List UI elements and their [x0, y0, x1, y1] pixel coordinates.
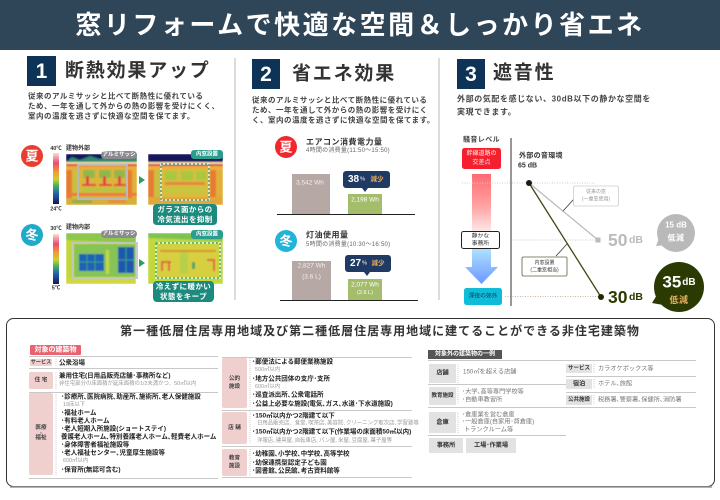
- label: inner window installed: [522, 257, 567, 276]
- row: education: 施設: [229, 462, 240, 470]
- icon: winter badge: [275, 230, 297, 252]
- label: late night suburb: 深夜の郊外: [468, 292, 498, 300]
- callout: summer result: [153, 204, 217, 225]
- bar chart: summer electricity: 3,542 Wh: [296, 180, 324, 186]
- row: public offices: 税務署､警察署､保健所､消防署: [598, 396, 682, 404]
- row: warehouses: [429, 410, 534, 434]
- bubble: 15 dB reduction: [656, 214, 695, 252]
- panel: section 2 energy saving: [252, 59, 435, 300]
- callout: winter result: 状態をキープ: [160, 291, 207, 301]
- tag: eligible buildings: 対象の建築物: [34, 344, 76, 354]
- icon: summer badge: [21, 145, 43, 167]
- pill: inner window: 内窓設置: [196, 150, 218, 158]
- section 3 body text: 実現できます。: [457, 106, 516, 116]
- label: inner window installed: 内窓設置: [534, 259, 555, 266]
- header band with title: 窓リフォームで快適な空間＆しっかり省エネ: [75, 10, 645, 40]
- icon: winter badge: 冬: [279, 234, 293, 248]
- outside sound environment label: 外部の音環境: [519, 150, 563, 160]
- icon: summer badge: 夏: [279, 140, 293, 154]
- row: medical and welfare: ･: [40, 431, 42, 437]
- section 1 body text: 従来のアルミサッシと比べて断熱性に優れている: [28, 90, 203, 100]
- row: medical and welfare: ･身体障害者福祉施設等: [61, 440, 130, 448]
- bubble: 15 dB reduction: 15 dB: [665, 220, 687, 230]
- row: public facilities: 500㎡以内: [255, 365, 280, 373]
- row: hotels: [566, 379, 632, 389]
- row: shops: [222, 410, 419, 444]
- row: education: ･幼保連携型認定子ども園: [252, 458, 327, 466]
- tag: factories: 工場･作業場: [474, 441, 508, 449]
- row: karaoke: カラオケボックス等: [598, 364, 654, 372]
- section 2 body text: く、室内の温度を逃さずに快適な空間を保てます。: [252, 114, 435, 124]
- row: medical and welfare: ･老人短期入所施設(ショートステイ): [61, 424, 166, 432]
- section 2 number badge: [252, 59, 280, 89]
- row: karaoke: [566, 364, 654, 373]
- row: medical and welfare: 養護老人ホーム､特別養護老人ホーム､軽費老人ホーム: [61, 432, 217, 440]
- row: service: 公衆浴場: [59, 358, 86, 366]
- row: housing: 非住宅部分の床面積が延床面積の1/2未満かつ、50㎡以内: [59, 379, 196, 387]
- section 2 number badge: 2: [260, 63, 272, 86]
- row: schools: ･大学､高等専門学校等: [462, 388, 524, 396]
- section 2 body text: [252, 94, 435, 124]
- pill: inner window winter: [191, 230, 223, 239]
- callout: 38 percent reduction: 38%: [348, 174, 365, 185]
- kerosene usage heading: 5時間の消費量(10:30～16:50): [306, 240, 390, 248]
- row: housing: [29, 370, 196, 389]
- row: schools: 教育施設: [431, 391, 454, 399]
- row: medical and welfare: 600㎡以内: [63, 456, 88, 464]
- label: conventional window: 従来の窓: [586, 188, 606, 195]
- panel: section 1 insulation: [21, 56, 223, 302]
- arrow: winter: [139, 259, 145, 267]
- row: public facilities: 施設: [229, 382, 240, 390]
- section 1 body text: ため、一年を通して外からの熱の影響を受けにくく、: [28, 100, 220, 110]
- tag: ineligible buildings: [428, 350, 502, 359]
- winter label: building interior: 建物内部: [66, 223, 90, 231]
- air conditioner usage heading: 4時間の消費量(11:50～15:50): [306, 146, 390, 154]
- bar chart: winter kerosene: 2,827 Wh: [298, 262, 326, 270]
- noise level scale heading: 騒音レベル: [463, 134, 500, 144]
- panel: building regulations: [6, 318, 714, 487]
- section 1 body text: [28, 90, 220, 120]
- regulations heading: 第一種低層住居専用地域及び第二種低層住居専用地域に建てることができる非住宅建築物: [120, 323, 640, 338]
- bubble: 35 dB reduction: 低減: [669, 294, 689, 305]
- row: public facilities: ･地方公共団体の支庁･支所: [252, 374, 330, 382]
- icon: winter badge: [21, 224, 43, 246]
- row: karaoke: サービス: [568, 364, 590, 372]
- row: warehouses: 倉庫: [436, 418, 449, 426]
- label: quiet office: 静かな: [472, 232, 489, 240]
- row: medical and welfare: ･有料老人ホーム: [61, 416, 110, 424]
- bar chart: winter kerosene: 2,077 Wh: [351, 282, 379, 288]
- value: 50 dB: 50dB: [608, 230, 643, 250]
- pill: aluminium sash winter: アルミサッシ: [103, 230, 136, 237]
- row: shops: ･150㎡以内かつ2階建て以下(作業場の床面積50㎡以内): [252, 426, 411, 436]
- row: stores over limit: 店舗: [436, 368, 449, 376]
- row: shops: 店 舗: [228, 423, 241, 431]
- callout: 38 percent reduction: 減少: [370, 174, 384, 183]
- row: stores over limit: 150㎡を超える店舗: [463, 368, 516, 376]
- summer temperature scale: [50, 145, 62, 212]
- pill: aluminium sash: [101, 151, 137, 159]
- row: medical and welfare: ･福祉ホーム: [61, 408, 97, 416]
- row: public facilities: [222, 356, 393, 408]
- value: 30 dB: 30dB: [608, 287, 643, 307]
- row: warehouses: トランクルーム等: [464, 426, 513, 434]
- arrow: summer: [139, 176, 145, 184]
- outside sound environment label: [518, 150, 563, 170]
- section 1 number badge: [27, 56, 56, 86]
- bar chart: summer electricity: 2,198 Wh: [351, 196, 379, 204]
- section 3 number badge: [457, 59, 485, 89]
- line chart: sound reduction: [526, 180, 604, 300]
- row: public facilities: 600㎡以内: [255, 382, 280, 390]
- winter temperature scale: [50, 225, 62, 292]
- callout: 27 percent reduction: 減少: [372, 258, 385, 267]
- section 3 number badge: 3: [465, 63, 477, 86]
- outside sound environment label: 65 dB: [518, 162, 537, 170]
- row: service: サービス: [31, 358, 51, 366]
- row: hotels: 宿泊: [573, 380, 585, 388]
- table: eligible buildings middle: [222, 356, 419, 478]
- section 3 body text: 外部の気配を感じない、30dB以下の静かな空間を: [457, 94, 651, 104]
- row: education: ･幼稚園､小学校､中学校､高等学校: [252, 448, 350, 458]
- label: inner window installed: (二重窓相当): [530, 266, 559, 274]
- callout: summer result: ガラス面からの: [157, 204, 213, 214]
- callout: winter result: 冷えずに暖かい: [156, 281, 211, 291]
- callout: winter result: [153, 281, 214, 302]
- thermal image: winter aluminium sash: [66, 233, 137, 284]
- row: schools: [429, 387, 524, 405]
- pill: aluminium sash winter: [101, 230, 137, 238]
- tag: eligible buildings: [30, 344, 81, 355]
- icon: summer badge: [275, 136, 297, 158]
- section 3 body text: [457, 94, 651, 116]
- row: public facilities: ･巡査派出所､公衆電話所: [252, 390, 324, 398]
- section 1 number badge: 1: [36, 60, 48, 83]
- callout: summer result: 冷気流出を抑制: [157, 214, 213, 224]
- row: schools: ･自動車教習所: [462, 396, 502, 404]
- bar chart: winter kerosene: (2.6 L): [357, 290, 373, 296]
- air conditioner usage heading: [306, 136, 390, 154]
- section 2 heading: 省エネ効果: [292, 62, 396, 84]
- row: stores over limit: [429, 364, 516, 383]
- row: housing: 住 宅: [35, 376, 48, 384]
- summer temperature scale: 40℃: [50, 145, 62, 152]
- bar chart: winter kerosene: [280, 255, 418, 300]
- summer temperature scale: 24℃: [50, 206, 62, 212]
- table: ineligible buildings right: [566, 360, 696, 408]
- row: hotels: ホテル､旅館: [598, 380, 632, 388]
- row: public facilities: 公的: [229, 374, 240, 382]
- row: public offices: [566, 395, 682, 405]
- panel: section 3 sound insulation: [457, 59, 704, 312]
- thermal image: summer aluminium sash: [66, 154, 137, 205]
- row: shops: 洋服店､建具屋､自転車店､パン屋､米屋､豆腐屋､菓子屋等: [257, 436, 393, 444]
- kerosene usage heading: [306, 230, 390, 248]
- callout: 27 percent reduction: 27%: [350, 258, 367, 269]
- summer label: building exterior: 建物外部: [66, 144, 90, 152]
- noise axis line: [510, 138, 512, 306]
- row: medical and welfare: 医療: [35, 423, 47, 431]
- row: shops: ･150㎡以内かつ2階建て以下: [252, 410, 335, 420]
- label: main road intersection: 幹線道路の: [466, 149, 497, 157]
- thermal image: winter inner window: [148, 233, 223, 284]
- row: medical and welfare: 福祉: [35, 433, 47, 441]
- row: education: [222, 448, 350, 476]
- label: conventional window: (一重窓使用): [582, 196, 610, 202]
- row: education: 教育: [229, 454, 240, 462]
- row: shops: 日用品販売店、食堂､喫茶店､美容院､クリーニング取次店､学習塾等: [257, 418, 419, 426]
- row: service: [30, 358, 86, 366]
- section 2 body text: ため、一年を通して外からの熱の影響を受けにく: [252, 104, 428, 114]
- tag: offices: 事務所: [437, 441, 456, 449]
- pill: inner window winter: 内窓設置: [196, 230, 218, 238]
- callout: 27 percent reduction: [345, 255, 391, 276]
- callout: 38 percent reduction: [343, 171, 390, 192]
- winter temperature scale: 30℃: [50, 225, 62, 232]
- icon: summer badge: 夏: [25, 148, 39, 164]
- row: medical and welfare: ･診療所､医院病院､助産所､施術所､老人保健施設: [61, 392, 201, 400]
- thermal image: summer inner window: [148, 154, 223, 205]
- bubble: 35 dB reduction: [652, 262, 704, 312]
- label: main road intersection: 交差点: [472, 158, 491, 166]
- gradient arrow: noise level: [465, 174, 498, 284]
- row: housing: 兼用住宅(日用品販売店舗･事務所など): [59, 370, 171, 380]
- row: public facilities: ･郵便法による郵便業務施設: [252, 356, 334, 366]
- section 1 body text: 室内の温度を逃さずに快適な空間を保てます。: [28, 110, 195, 120]
- tag: ineligible buildings: 対象外の建築物の一例: [435, 350, 495, 358]
- header band with title: [0, 0, 720, 50]
- section 1 heading: 断熱効果アップ: [65, 60, 211, 82]
- table: ineligible buildings left: [428, 360, 566, 453]
- section 2 body text: 従来のアルミサッシと比べて断熱性に優れている: [252, 94, 427, 104]
- row: medical and welfare: 19床以下: [63, 401, 86, 408]
- icon: winter badge: 冬: [25, 228, 39, 242]
- label: conventional window: [574, 186, 618, 206]
- bubble: 35 dB reduction: 35dB: [662, 272, 696, 292]
- row: education: ･図書館､公民館､考古資料館等: [252, 466, 340, 474]
- row: medical and welfare: ･老人福祉センター､児童厚生施設等: [61, 448, 166, 456]
- row: medical and welfare: [29, 392, 217, 475]
- row: public offices: 公共施設: [568, 395, 590, 403]
- kerosene usage heading: 灯油使用量: [306, 230, 348, 240]
- row: public facilities: ･公益上必要な施設(電気､ガス､水道･下水道施設): [252, 398, 393, 408]
- label: quiet office: [462, 232, 500, 248]
- table: eligible buildings left: [29, 356, 218, 478]
- winter temperature scale: 5℃: [52, 284, 61, 292]
- air conditioner usage heading: エアコン消費電力量: [306, 136, 382, 146]
- section 3 heading: 遮音性: [493, 62, 555, 84]
- label: quiet office: 事務所: [472, 239, 489, 247]
- label: late night suburb: [464, 288, 502, 305]
- bar chart: summer electricity: [277, 171, 415, 214]
- label: main road intersection: [462, 148, 501, 169]
- row: warehouses: ･一般倉庫(自家用･貸倉庫): [462, 418, 534, 426]
- bar chart: winter kerosene: (3.6 L): [302, 274, 321, 280]
- row: warehouses: ･倉庫業を営む倉庫: [462, 410, 515, 418]
- pill: aluminium sash: アルミサッシ: [103, 151, 136, 158]
- row: medical and welfare: ･保育所(無認可含む): [61, 464, 121, 474]
- bubble: 15 dB reduction: 低減: [668, 232, 684, 242]
- pill: inner window: [191, 150, 223, 159]
